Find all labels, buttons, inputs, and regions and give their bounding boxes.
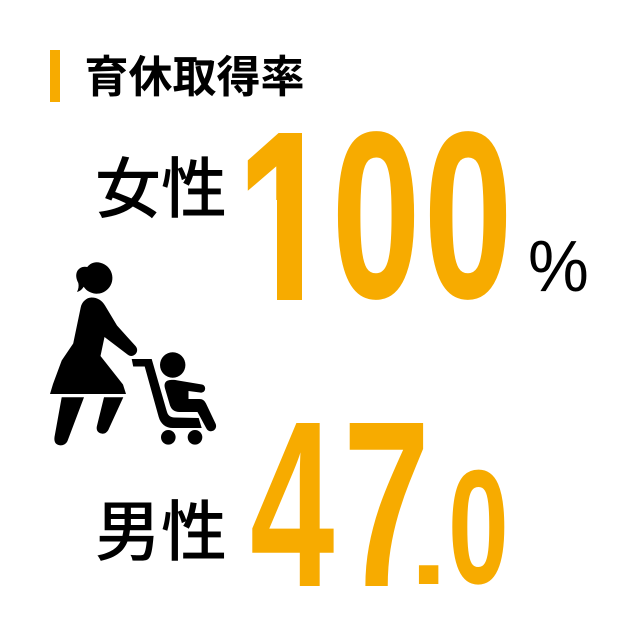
value: male 47.0: 0 xyxy=(448,438,509,618)
icon: mother dress and arm xyxy=(50,298,137,394)
value: male 47.0 xyxy=(250,371,509,637)
value: male 47.0: . xyxy=(410,470,448,611)
value: female 100 percent: % xyxy=(528,225,589,306)
icon: stroller rear wheel xyxy=(161,430,176,445)
label: female: 女性 xyxy=(95,152,227,226)
icon: child head xyxy=(160,352,185,378)
icon: mother left leg xyxy=(54,397,84,445)
icon: stroller front wheel xyxy=(188,430,202,445)
icon: child body xyxy=(165,380,216,431)
value: female 100 percent xyxy=(248,131,586,300)
icon: stroller frame xyxy=(132,359,202,428)
value: male 47.0: 4 xyxy=(250,373,334,637)
value: female 100 percent: 0 xyxy=(332,82,420,348)
heading accent bar xyxy=(50,50,60,102)
label: male: 男性 xyxy=(95,495,227,569)
value: female 100 percent: 0 xyxy=(424,82,512,348)
icon: mother head xyxy=(76,262,112,294)
icon: mother pushing stroller xyxy=(50,262,216,445)
icon: mother right leg xyxy=(97,397,123,434)
value: female 100 percent: 1 xyxy=(238,83,333,348)
value: male 47.0: 7 xyxy=(343,371,430,637)
title: 育休取得率 xyxy=(84,53,304,102)
